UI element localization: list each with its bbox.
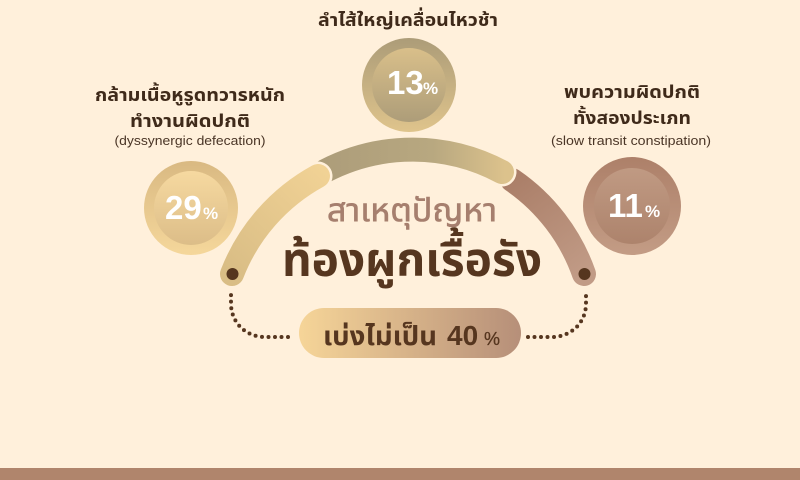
pill: unclassified 40% (299, 308, 521, 358)
dotted connector right (528, 290, 586, 337)
label: right cause: พบความผิดปกติ (564, 82, 700, 102)
value 11%: 11 (608, 187, 643, 224)
circle: 11% (583, 157, 681, 255)
left end dot (226, 268, 238, 280)
center title line 2: ท้องผูกเรื้อรัง (282, 227, 542, 288)
label: right cause: ทั้งสองประเภท (573, 106, 691, 128)
label: right cause: (slow transit constipation) (551, 133, 711, 148)
value 29%: 29 (165, 189, 202, 226)
label: left cause: ทำงานผิดปกติ (130, 111, 250, 131)
bottom band (0, 468, 800, 480)
circle: 29% (144, 161, 238, 255)
value 13%: % (423, 79, 438, 98)
arc segment: slow colon outline (325, 150, 502, 172)
value 11%: % (645, 202, 660, 221)
center title line 1: สาเหตุปัญหา (327, 192, 497, 229)
arc chart: three cause segments (232, 150, 584, 274)
right end dot (578, 268, 590, 280)
arc segment: dyssynergic (232, 176, 318, 274)
pill value: % (484, 329, 500, 349)
value 13%: 13 (387, 64, 424, 101)
dotted connector left (231, 290, 288, 337)
arc segment: dyssynergic outline (232, 176, 318, 274)
label: left cause: กล้ามเนื้อหูรูดทวารหนัก (95, 82, 285, 106)
value 29%: % (203, 204, 218, 223)
label: left cause (95, 82, 285, 148)
pill label: เบ่งไม่เป็น (323, 321, 437, 351)
label: right cause (551, 82, 711, 148)
arc segment: slow transit (512, 180, 584, 274)
arc segment: slow colon (325, 150, 502, 172)
label: top cause: ลำไส้ใหญ่เคลื่อนไหวช้า (318, 7, 498, 30)
label: left cause: (dyssynergic defecation) (114, 133, 266, 148)
circle: 13% (362, 38, 456, 132)
pill value: 40 (447, 320, 478, 351)
